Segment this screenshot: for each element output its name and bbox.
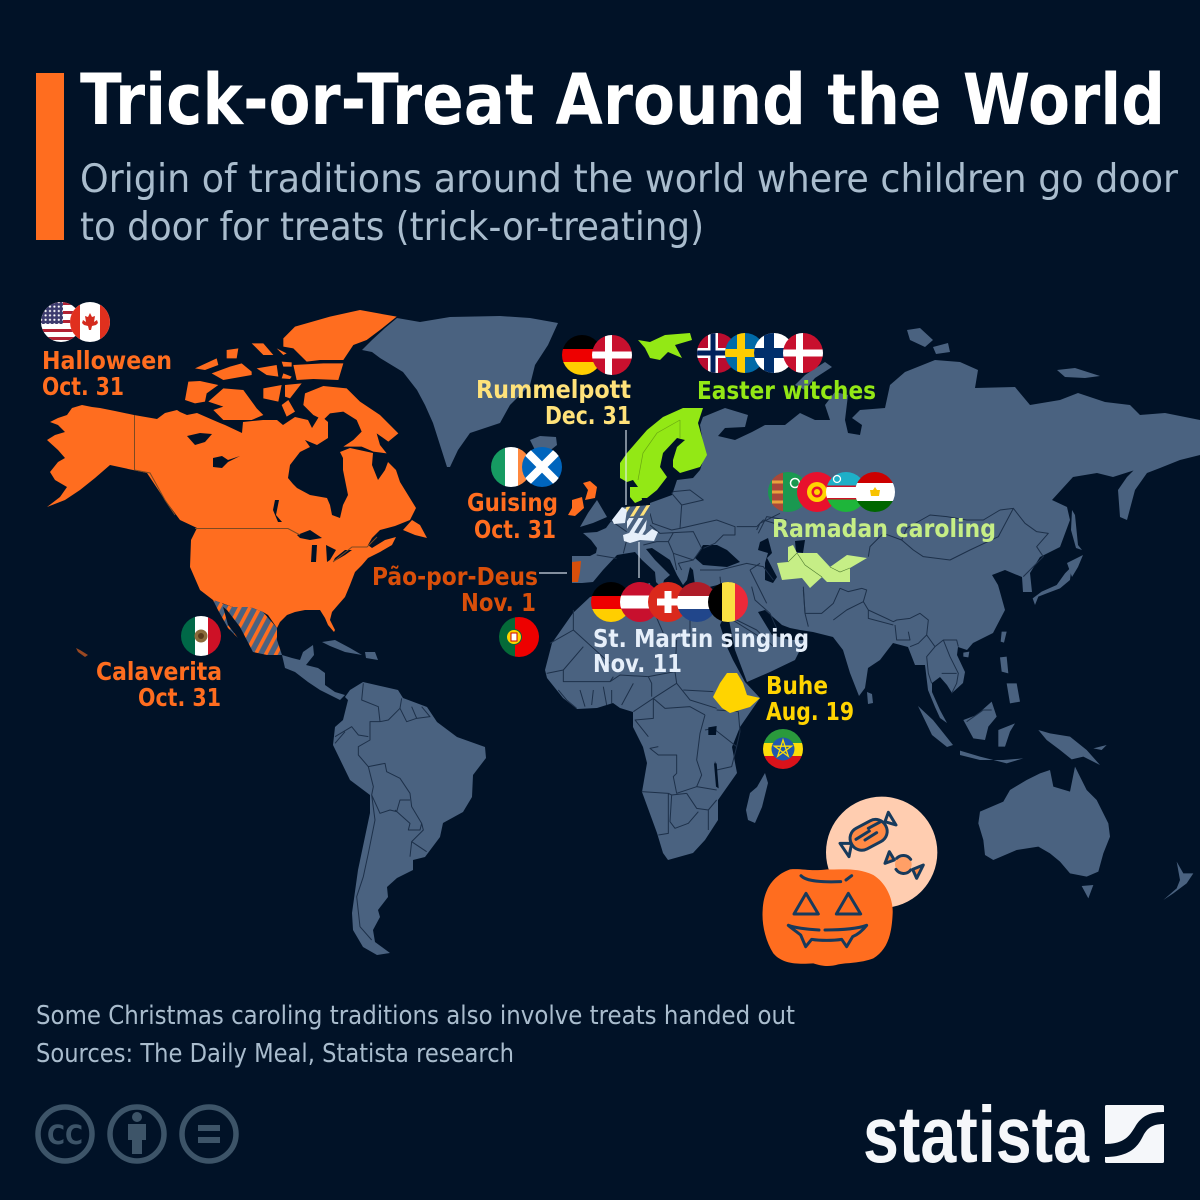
accent bar xyxy=(36,73,64,240)
flags: Germany and Denmark xyxy=(562,335,632,375)
region: Easter witches, Nordics xyxy=(620,333,707,503)
leader lines xyxy=(539,430,639,578)
landmass: Central America and Caribbean xyxy=(282,640,378,700)
subtitle: to door for treats (trick-or-treating) xyxy=(80,205,704,250)
landmass: South America xyxy=(333,682,486,955)
region: Guising, Scotland and Ireland xyxy=(568,481,597,516)
country borders: South America and Africa xyxy=(335,640,740,940)
label: Calaverita xyxy=(96,657,222,712)
icon: small candy xyxy=(885,852,923,878)
label: Pão-por-Deus xyxy=(372,562,538,617)
region: Mexico hatching (Calaverita) xyxy=(213,600,282,655)
icon: attribution xyxy=(110,1107,164,1161)
statista logo: statista xyxy=(863,1090,1089,1179)
label: Pão-por-Deus: Nov. 1 xyxy=(461,588,536,617)
landmass: Madagascar xyxy=(746,773,768,823)
world map xyxy=(47,310,1200,955)
icon: pumpkin xyxy=(762,869,893,966)
label: Rummelpott xyxy=(476,375,631,430)
icon: creative commons xyxy=(38,1107,92,1161)
country borders: Asia north xyxy=(752,508,1048,628)
label: Calaverita: Oct. 31 xyxy=(138,683,221,712)
label: Easter witches: Easter witches xyxy=(697,376,876,405)
label: Rummelpott: Dec. 31 xyxy=(545,401,631,430)
label: Guising: Oct. 31 xyxy=(474,515,556,544)
icon: no derivatives xyxy=(182,1107,236,1161)
region: St. Martin and Rummelpott hatching xyxy=(612,505,658,543)
North American lakes xyxy=(187,433,352,562)
footnote and sources: Sources: The Daily Meal, Statista research xyxy=(36,1039,514,1069)
region: Portugal xyxy=(572,561,581,582)
flags: Ireland and Scotland xyxy=(491,447,562,487)
landmass: Africa xyxy=(545,583,760,860)
label: Pão-por-Deus: Pão-por-Deus xyxy=(372,562,538,591)
flags: Turkmenistan, Kyrgyzstan, Uzbekistan, Tajikistan xyxy=(768,472,895,512)
region: North America (Halloween) xyxy=(47,310,427,657)
label: Halloween: Oct. 31 xyxy=(42,372,124,401)
label: Calaverita: Calaverita xyxy=(96,657,222,686)
North American borders xyxy=(134,415,377,562)
landmass: Asian and Arctic islands xyxy=(795,328,1100,747)
country borders: South Asia xyxy=(803,587,992,722)
landmass: Greenland xyxy=(362,316,558,467)
label: Halloween: Halloween xyxy=(42,346,172,375)
landmass: Iceland xyxy=(530,436,557,453)
country borders: Europe xyxy=(597,490,780,580)
Canadian Arctic archipelago xyxy=(185,310,398,453)
Nordic borders xyxy=(638,420,680,480)
icon: creative commons: CC xyxy=(47,1120,83,1151)
inland seas xyxy=(695,538,805,583)
icon: statista mark xyxy=(1105,1105,1164,1163)
landmass: Great Britain xyxy=(580,500,607,527)
flag: Portugal xyxy=(499,617,539,657)
label: St. Martin singing: Nov. 11 xyxy=(593,649,682,678)
footnote and sources xyxy=(36,1001,795,1069)
landmass: Eurasia xyxy=(572,360,1200,723)
licence icons xyxy=(38,1107,236,1161)
flag: Ethiopia xyxy=(763,729,803,769)
label: Buhe xyxy=(766,671,854,726)
landmass: Southeast Asia and Oceania xyxy=(960,567,1193,900)
icon: peach circle xyxy=(826,797,937,908)
region: Ethiopia, Buhe xyxy=(713,673,760,713)
footnote and sources: Some Christmas caroling traditions also involve treats handed out xyxy=(36,1001,795,1031)
label: St. Martin singing xyxy=(593,624,809,678)
icon: large candy xyxy=(840,812,896,857)
label: Halloween xyxy=(42,346,172,401)
subtitle xyxy=(80,157,1179,250)
label: Guising: Guising xyxy=(467,488,558,517)
country borders: Middle East and North Africa xyxy=(550,513,780,663)
flags: Germany, Austria, Switzerland, Netherlands, Belgium xyxy=(591,582,748,622)
label: Buhe: Aug. 19 xyxy=(766,697,854,726)
flags: Norway, Sweden, Finland, Denmark xyxy=(697,333,823,373)
flag: Mexico xyxy=(181,616,221,656)
label: Rummelpott: Rummelpott xyxy=(476,375,631,404)
label: Guising xyxy=(467,488,558,544)
icon: pumpkin face xyxy=(788,876,867,947)
label: St. Martin singing: St. Martin singing xyxy=(593,624,809,653)
label: Buhe: Buhe xyxy=(766,671,828,700)
flags: USA and Canada xyxy=(41,302,110,342)
region: Ramadan caroling, Central Asia xyxy=(777,545,867,588)
label: Ramadan caroling: Ramadan caroling xyxy=(772,514,996,543)
icon: candy circle and pumpkin xyxy=(762,797,937,966)
